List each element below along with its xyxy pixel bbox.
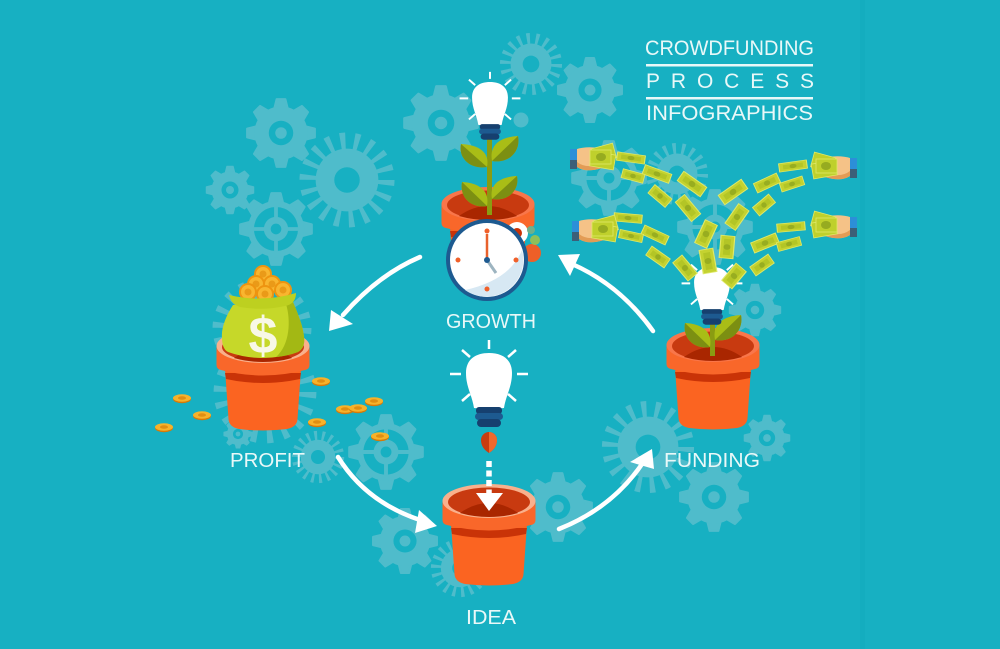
flying bills: [614, 152, 807, 289]
plant: growth: [461, 135, 518, 215]
icon: growth bulb: [460, 72, 520, 140]
icon: money bag: [222, 293, 304, 365]
dotted arrow: [476, 461, 503, 511]
scattered coins: [155, 377, 389, 441]
icon: clock: [446, 219, 528, 301]
pot: growth: [442, 187, 534, 288]
icon: hand top right: [811, 152, 857, 179]
arrow: funding to growth: [558, 254, 653, 331]
icon: funding bulb: [682, 257, 742, 325]
background gears: [206, 39, 790, 591]
title: [645, 37, 814, 125]
arrow: idea to funding: [559, 449, 654, 529]
arrow: growth to profit: [329, 257, 420, 331]
plant: funding: [685, 315, 741, 356]
funding stage: [570, 143, 857, 430]
icon: hand lower left: [572, 215, 618, 242]
pot: funding: [666, 328, 760, 430]
label: funding: FUNDING: [664, 450, 760, 472]
profit stage: [216, 265, 310, 430]
bag coins: [239, 265, 292, 303]
label: profit: PROFIT: [230, 450, 305, 472]
icon: hand lower right: [811, 211, 857, 238]
growth stage: [442, 72, 541, 301]
icon: money bag: $: [249, 307, 278, 365]
title: INFOGRAPHICS: [646, 102, 813, 125]
pot: profit: [216, 329, 310, 430]
label: growth: GROWTH: [446, 311, 536, 333]
label: idea: IDEA: [466, 607, 517, 629]
title: CROWDFUNDING: [645, 37, 814, 60]
pot: idea: [442, 484, 536, 586]
arrow: profit to idea: [338, 457, 437, 533]
idea stage: [442, 340, 536, 586]
title: PROCESS: [646, 70, 814, 93]
icon: idea bulb: [450, 340, 528, 427]
icon: hand top left: [570, 143, 616, 170]
small gears beside clock: [506, 222, 541, 262]
icon: seed: [481, 432, 497, 453]
